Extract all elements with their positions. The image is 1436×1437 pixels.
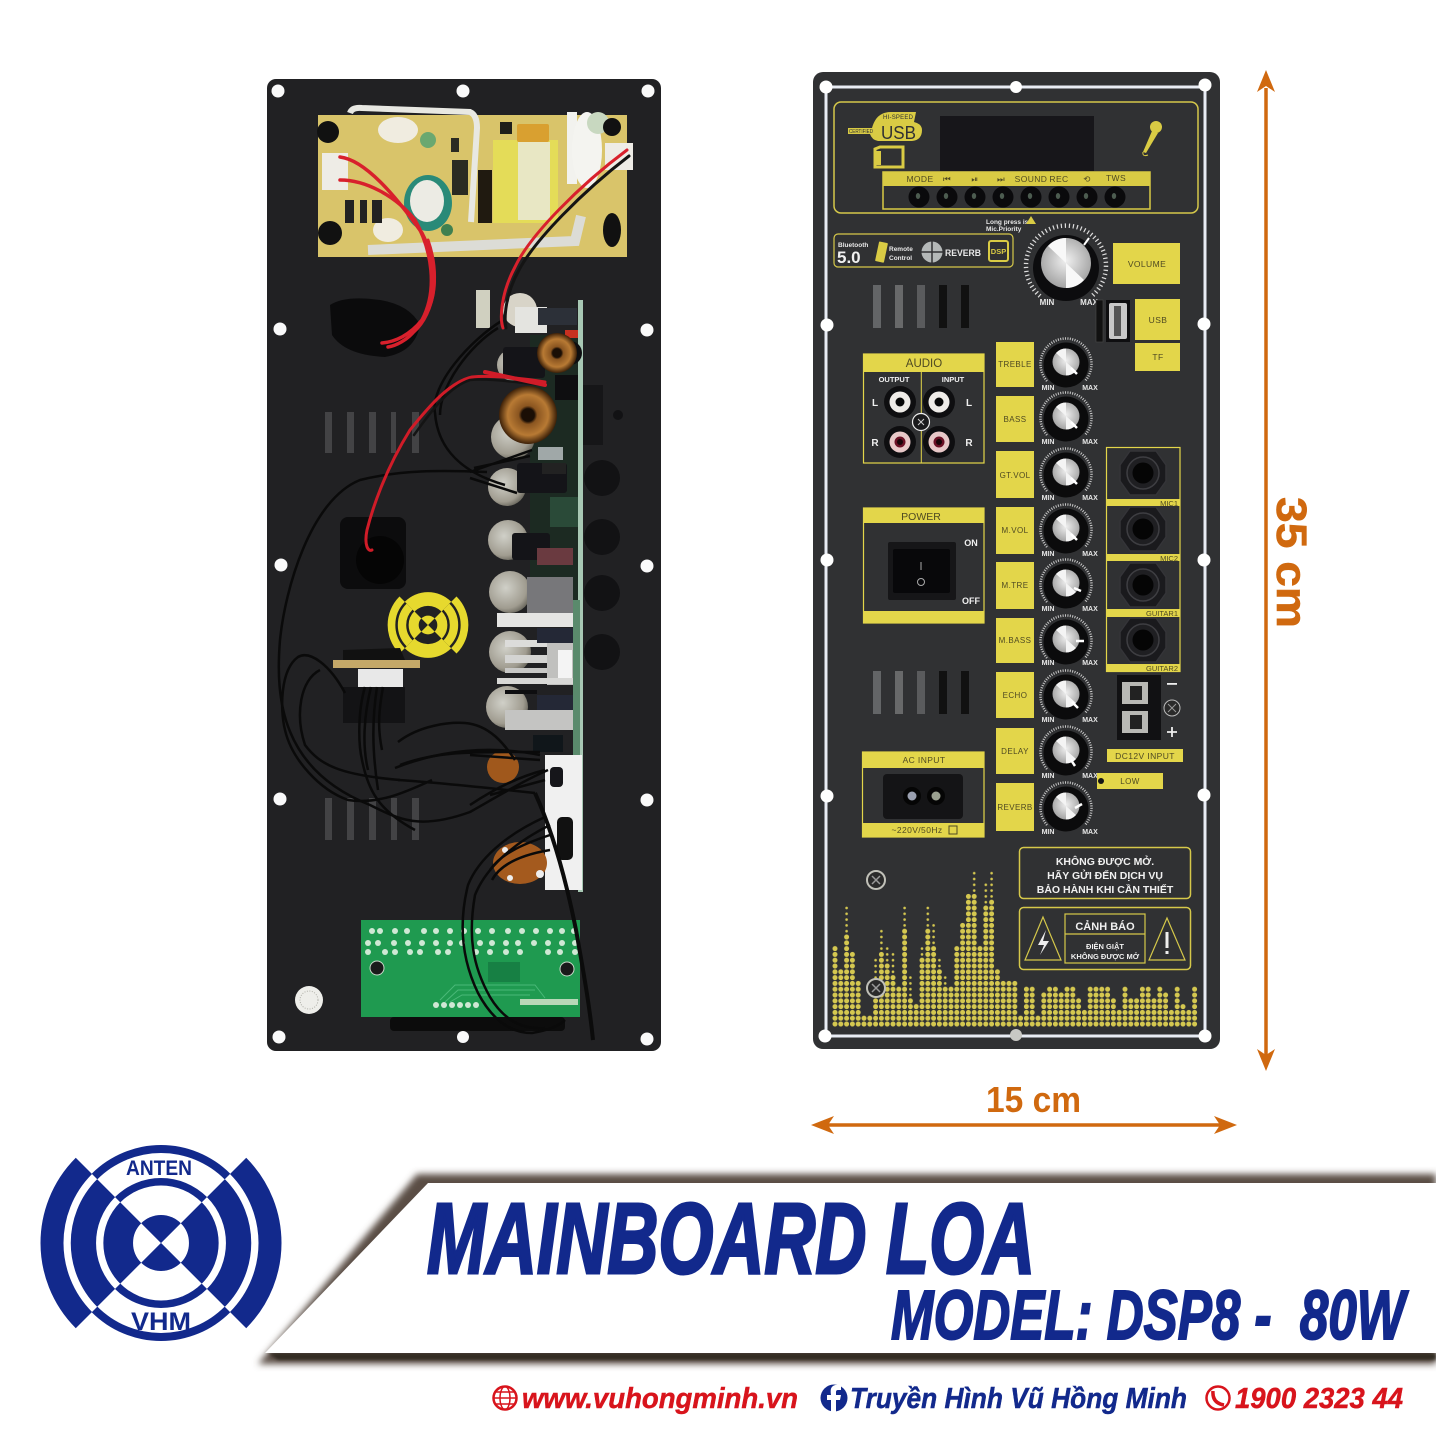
panel screws [867, 871, 885, 997]
USB certified logo: HI-SPEED [883, 115, 914, 121]
audio panel: INPUT [942, 375, 965, 384]
dot-matrix spectrum graphic [832, 870, 1198, 1027]
channel knobs: MAX [1082, 829, 1098, 836]
grommet top [330, 298, 420, 357]
dimension: height 35 cm [1257, 70, 1315, 1071]
feature badge: 5.0 [837, 248, 861, 267]
channel knobs: MIN [1042, 551, 1054, 558]
audio panel [863, 354, 984, 463]
channel labels: BASS [1004, 415, 1026, 424]
black signal wires [279, 320, 593, 1040]
icon: phone [1206, 1386, 1230, 1410]
warning: electric shock: CẢNH BÁO [1075, 920, 1135, 933]
LOW label [1097, 773, 1163, 789]
LOW label: LOW [1120, 777, 1140, 786]
button strip: ⏮ [943, 174, 951, 184]
warning: electric shock: KHÔNG ĐƯỢC MỞ [1071, 952, 1140, 961]
long press note: Long press is [986, 219, 1029, 226]
channel knobs: MAX [1082, 551, 1098, 558]
icon: globe [494, 1386, 516, 1410]
button strip: ⏭ [997, 174, 1005, 184]
volume knob [1026, 226, 1106, 307]
panel: front of mainboard (photo) [813, 72, 1220, 1049]
channel labels: REVERB [997, 803, 1033, 812]
green pcb [361, 920, 580, 1031]
volume label [1113, 243, 1180, 284]
channel knobs: MAX [1082, 773, 1098, 780]
channel knobs: MAX [1082, 439, 1098, 446]
hotline: 1900 2323 44 [1235, 1383, 1403, 1415]
channel knobs: MIN [1042, 773, 1054, 780]
button strip: TWS [1106, 173, 1126, 183]
small connector module [333, 648, 420, 723]
ac input panel: AC INPUT [903, 755, 945, 765]
volume knob: MAX [1080, 298, 1099, 307]
power panel: OFF [962, 596, 980, 606]
back plate [267, 79, 661, 1051]
feature badge [834, 234, 1013, 267]
channel labels: M.BASS [999, 636, 1031, 645]
website: www.vuhongminh.vn [522, 1383, 798, 1415]
mic and guitar jacks: GUITAR2 [1146, 664, 1178, 673]
power supply board [317, 108, 633, 257]
feature badge: Remote [889, 246, 913, 253]
bottom vents [873, 671, 969, 714]
warning: do not open: BẢO HÀNH KHI CẦN THIẾT [1037, 883, 1174, 896]
rear rubber feet [583, 385, 623, 670]
mic and guitar jacks: MIC1 [1160, 499, 1178, 508]
USB certified logo: CERTIFIED [849, 129, 873, 135]
audio panel: R [871, 438, 879, 449]
channel labels: TREBLE [998, 360, 1032, 369]
channel knobs: MIN [1042, 606, 1054, 613]
banner shadow [258, 1174, 1436, 1364]
channel knobs [1040, 338, 1098, 836]
warning: do not open: KHÔNG ĐƯỢC MỞ. [1056, 855, 1154, 868]
power panel: POWER [901, 511, 941, 523]
channel labels: DELAY [1001, 747, 1029, 756]
logo: Anten VHM: VHM [131, 1308, 191, 1336]
top vents [873, 285, 969, 328]
button strip: REC [1049, 174, 1069, 184]
channel labels [996, 342, 1034, 831]
title: MAINBOARD LOA [427, 1183, 1035, 1295]
button strip: ⏯ [971, 174, 979, 184]
channel knobs: MIN [1042, 495, 1054, 502]
LED display [940, 116, 1094, 171]
DC 12V terminal [1117, 675, 1180, 740]
mic and guitar jacks [1106, 448, 1180, 673]
microphone icon [1143, 121, 1162, 156]
feature badge: DSP [991, 247, 1006, 256]
white sticker [295, 986, 323, 1014]
audio panel: R [965, 438, 973, 449]
banner shadow bottom edge [268, 1353, 1436, 1360]
power panel [863, 508, 984, 623]
vent slots [325, 412, 419, 840]
warning: do not open: HÃY GỬI ĐẾN DỊCH VỤ [1047, 869, 1163, 882]
TF label: TF [1152, 352, 1164, 362]
audio panel: L [872, 398, 878, 409]
logo: Anten VHM: ANTEN [126, 1157, 192, 1180]
channel knobs: MIN [1042, 829, 1054, 836]
channel knobs: MAX [1082, 385, 1098, 392]
channel knobs: MAX [1082, 660, 1098, 667]
dimension: width 15 cm: 15 cm [986, 1079, 1081, 1120]
amplifier board [476, 290, 583, 892]
top display panel [834, 102, 1198, 213]
dimension: width 15 cm [811, 1079, 1237, 1134]
USB and TF ports [1096, 300, 1130, 342]
channel labels: GT.VOL [1000, 471, 1031, 480]
warning: electric shock [1020, 908, 1190, 970]
facebook page: Truyền Hình Vũ Hồng Minh [850, 1383, 1187, 1415]
channel knobs: MAX [1082, 606, 1098, 613]
white border line [826, 87, 1205, 1036]
grommet bottom [340, 517, 406, 589]
long press note [986, 216, 1036, 233]
channel knobs: MAX [1082, 495, 1098, 502]
warning: electric shock: ĐIỆN GIẬT [1086, 942, 1124, 951]
DC12V input label [1107, 749, 1183, 762]
channel knobs: MIN [1042, 660, 1054, 667]
power panel: ON [964, 538, 978, 548]
yellow brand sticker [391, 588, 465, 662]
channel knobs: MIN [1042, 385, 1054, 392]
button strip [883, 172, 1150, 209]
channel labels: M.TRE [1002, 581, 1028, 590]
button strip: ⟲ [1083, 174, 1091, 184]
channel labels: ECHO [1003, 691, 1027, 700]
long press note: Mic.Priority [986, 226, 1022, 233]
channel knobs: MAX [1082, 717, 1098, 724]
title banner [258, 1174, 1436, 1364]
feature badge: Control [889, 255, 912, 262]
mounting holes [272, 84, 654, 1046]
ac input panel [862, 752, 984, 837]
button strip: SOUND [1015, 174, 1047, 184]
TF label [1135, 343, 1180, 371]
channel knobs: MIN [1042, 439, 1054, 446]
USB label [1135, 299, 1180, 340]
feature badge: Bluetooth [838, 242, 868, 249]
front plate [813, 72, 1220, 1049]
dimension: height 35 cm: 35 cm [1267, 497, 1315, 628]
warning: do not open [1020, 848, 1190, 898]
banner face [265, 1183, 1436, 1353]
panel: back of mainboard (photo) [267, 79, 661, 1051]
ac input panel: ~220V/50Hz [891, 825, 943, 835]
volume label: VOLUME [1128, 259, 1166, 269]
feature badge: REVERB [945, 248, 981, 258]
USB certified logo [848, 112, 922, 143]
channel knobs: MIN [1042, 717, 1054, 724]
DC12V input label: DC12V INPUT [1115, 751, 1175, 761]
mic and guitar jacks: GUITAR1 [1146, 609, 1178, 618]
footer contacts [494, 1383, 1403, 1415]
mic and guitar jacks: MIC2 [1160, 554, 1178, 563]
USB label: USB [1149, 315, 1167, 325]
audio panel: AUDIO [906, 358, 942, 370]
red power wires [340, 150, 629, 550]
volume knob: MIN [1040, 298, 1055, 307]
icon: facebook [820, 1384, 848, 1412]
SD card icon [875, 147, 903, 167]
mounting holes [818, 78, 1212, 1042]
channel labels: M.VOL [1002, 526, 1029, 535]
audio panel: L [966, 398, 972, 409]
button strip: MODE [906, 174, 934, 184]
USB certified logo: USB [881, 123, 916, 143]
logo: Anten VHM [52, 1134, 270, 1352]
audio panel: OUTPUT [879, 375, 910, 384]
